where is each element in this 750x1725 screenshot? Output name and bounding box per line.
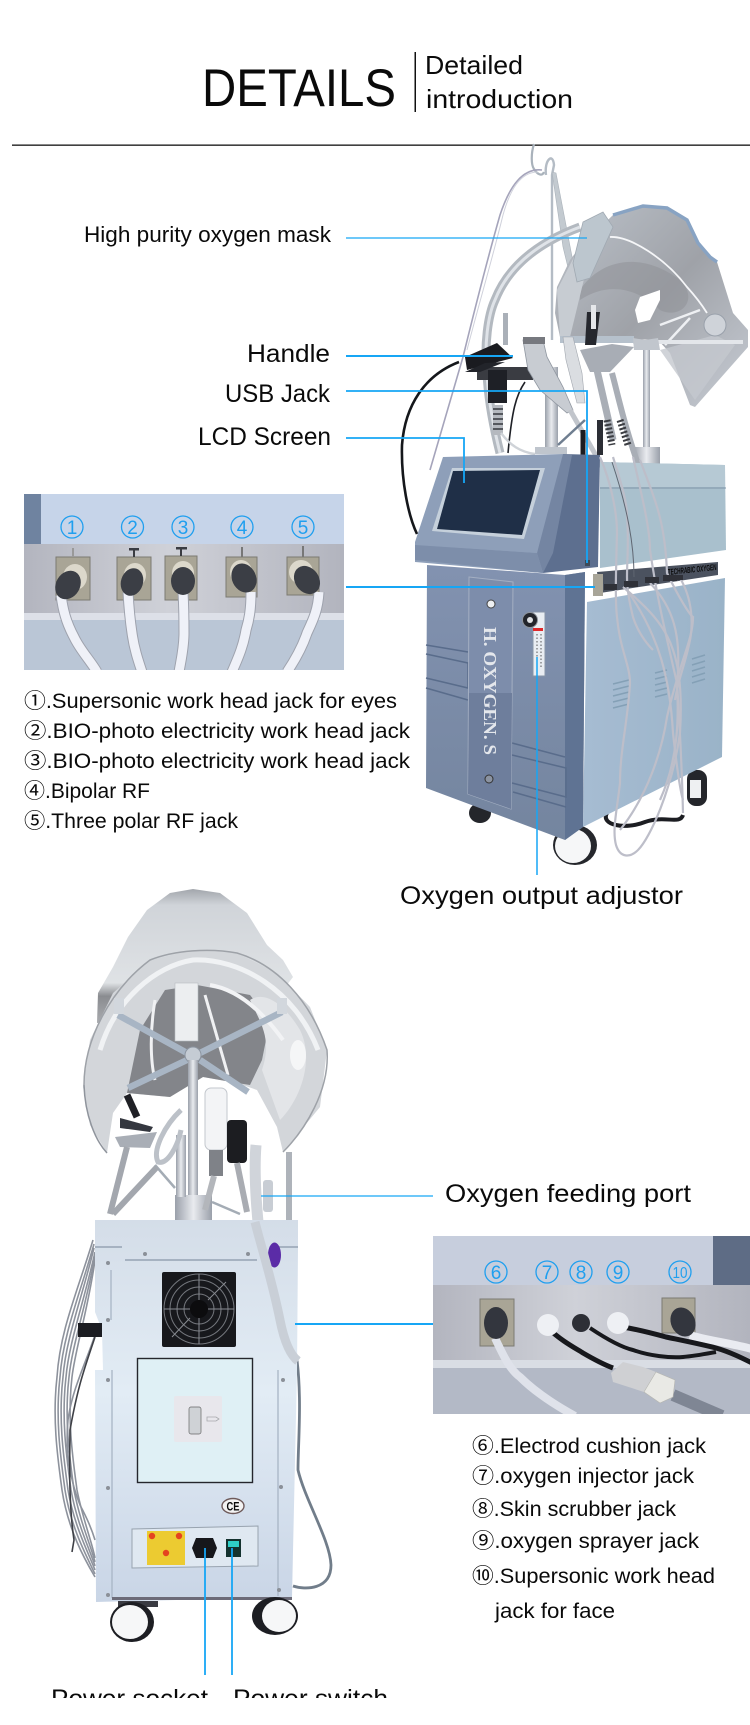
text block: jack list 1 to 5: ⑤.Three polar RF jack [24, 810, 239, 833]
rear machine photo [55, 889, 331, 1642]
jack numbers [485, 1261, 691, 1284]
connectors [55, 564, 320, 600]
jack plates [56, 556, 319, 600]
cables [495, 1327, 750, 1416]
pointer line from jack photo [346, 586, 595, 588]
text block: jack list 1 to 5: ①.Supersonic work head jack for eyes [24, 690, 397, 713]
text block: jack list 1 to 5: ②.BIO-photo electricity work head jack [24, 720, 411, 743]
jack numbers: 5 [298, 518, 308, 539]
oxygen flow meter [522, 612, 545, 676]
text block: jack list 6 to 10: ⑩.Supersonic work head [472, 1565, 715, 1588]
pointer line to jack photo [295, 1323, 433, 1325]
central pole [155, 1060, 240, 1220]
text block: jack list 6 to 10: ⑨.oxygen sprayer jack [472, 1530, 700, 1553]
front glass label [468, 577, 513, 809]
hanging hooks, strap and thin wire [430, 144, 578, 470]
cooling fan [162, 1272, 236, 1347]
jack numbers: 3 [178, 518, 188, 539]
right oxygen tube [293, 1360, 331, 1588]
jack numbers: 7 [542, 1263, 552, 1284]
rear cabinet [78, 1220, 298, 1602]
jack numbers: 9 [613, 1263, 623, 1284]
label: USB Jack: USB Jack [225, 380, 330, 408]
connectors [484, 1303, 700, 1403]
pointer line: power switch [231, 1548, 233, 1675]
label: High purity oxygen mask: High purity oxygen mask [84, 222, 332, 247]
oxygen hood [486, 206, 748, 453]
label: Oxygen feeding port: Oxygen feeding port [445, 1180, 691, 1208]
black power cable [402, 362, 459, 534]
work heads [110, 1088, 292, 1222]
subtitle: Detailed introduction [425, 50, 573, 114]
jack numbers: 2 [127, 518, 138, 539]
jack numbers: 4 [237, 518, 248, 539]
jack numbers: 10 [672, 1265, 688, 1282]
connector row [593, 574, 683, 596]
panel: jacks 1 to 5 photo [24, 494, 344, 672]
label: USB Jack [225, 380, 587, 563]
plate knobs [72, 546, 304, 557]
left bundled cables [55, 1240, 95, 1577]
text block: jack list 1 to 5: ③.BIO-photo electricity work head jack [24, 750, 411, 773]
labels: Power socket and Power switch, clipped at the bottom: Power socket [51, 1685, 208, 1713]
CE mark: CE [226, 1500, 240, 1514]
panel: jacks 6 to 10 photo [433, 1236, 750, 1416]
divider between title and subtitle [414, 52, 416, 112]
label: LCD Screen: LCD Screen [198, 423, 331, 451]
subtitle: Detailed introduction: introduction [426, 84, 573, 114]
jack numbers: 8 [576, 1263, 586, 1284]
text block: jack list 6 to 10: jack for face [494, 1600, 615, 1623]
text block: jack list 1 to 5: ④.Bipolar RF [24, 780, 150, 803]
subtitle: Detailed introduction: Detailed [425, 50, 523, 80]
front machine photo [402, 144, 748, 865]
bundled white cables [600, 457, 693, 855]
jack plates [480, 1298, 695, 1346]
casters [469, 770, 707, 865]
header rule [12, 144, 750, 146]
text block: jack list 6 to 10: ⑦.oxygen injector jack [472, 1465, 695, 1488]
labels: Power socket and Power switch, clipped at the bottom [53, 1689, 386, 1698]
silver rings [63, 560, 313, 590]
work head handles [465, 305, 640, 470]
white cables [61, 592, 319, 672]
control head with LCD screen [415, 454, 600, 573]
front cabinet body [426, 562, 725, 840]
ribbed oxygen hose [255, 1222, 298, 1361]
pointer line: power socket [204, 1548, 206, 1675]
text block: jack list 6 to 10 [472, 1435, 715, 1623]
label: LCD Screen [198, 423, 464, 483]
labels: Power socket and Power switch, clipped at the bottom: Power switch [233, 1685, 388, 1713]
power panel [132, 1526, 258, 1568]
rear door with sticker [138, 1358, 252, 1482]
casters [110, 1597, 298, 1642]
oxygen hood rear view [83, 889, 327, 1153]
text block: jack list 6 to 10: ⑥.Electrod cushion jack [472, 1435, 707, 1458]
rear cabinet top [600, 462, 726, 568]
jack numbers: 6 [491, 1263, 501, 1284]
cross arms [114, 998, 287, 1092]
text block: jack list 1 to 5 [24, 690, 411, 833]
support poles [535, 338, 660, 464]
text block: jack list 6 to 10: ⑧.Skin scrubber jack [472, 1498, 677, 1521]
front glass label: H. OXYGEN. S [480, 627, 500, 755]
label: Oxygen output adjustor: Oxygen output adjustor [400, 882, 683, 910]
jack numbers: 1 [67, 518, 77, 539]
label: Handle: Handle [247, 340, 330, 368]
jack numbers [61, 516, 314, 539]
title: DETAILS: DETAILS [202, 59, 396, 118]
